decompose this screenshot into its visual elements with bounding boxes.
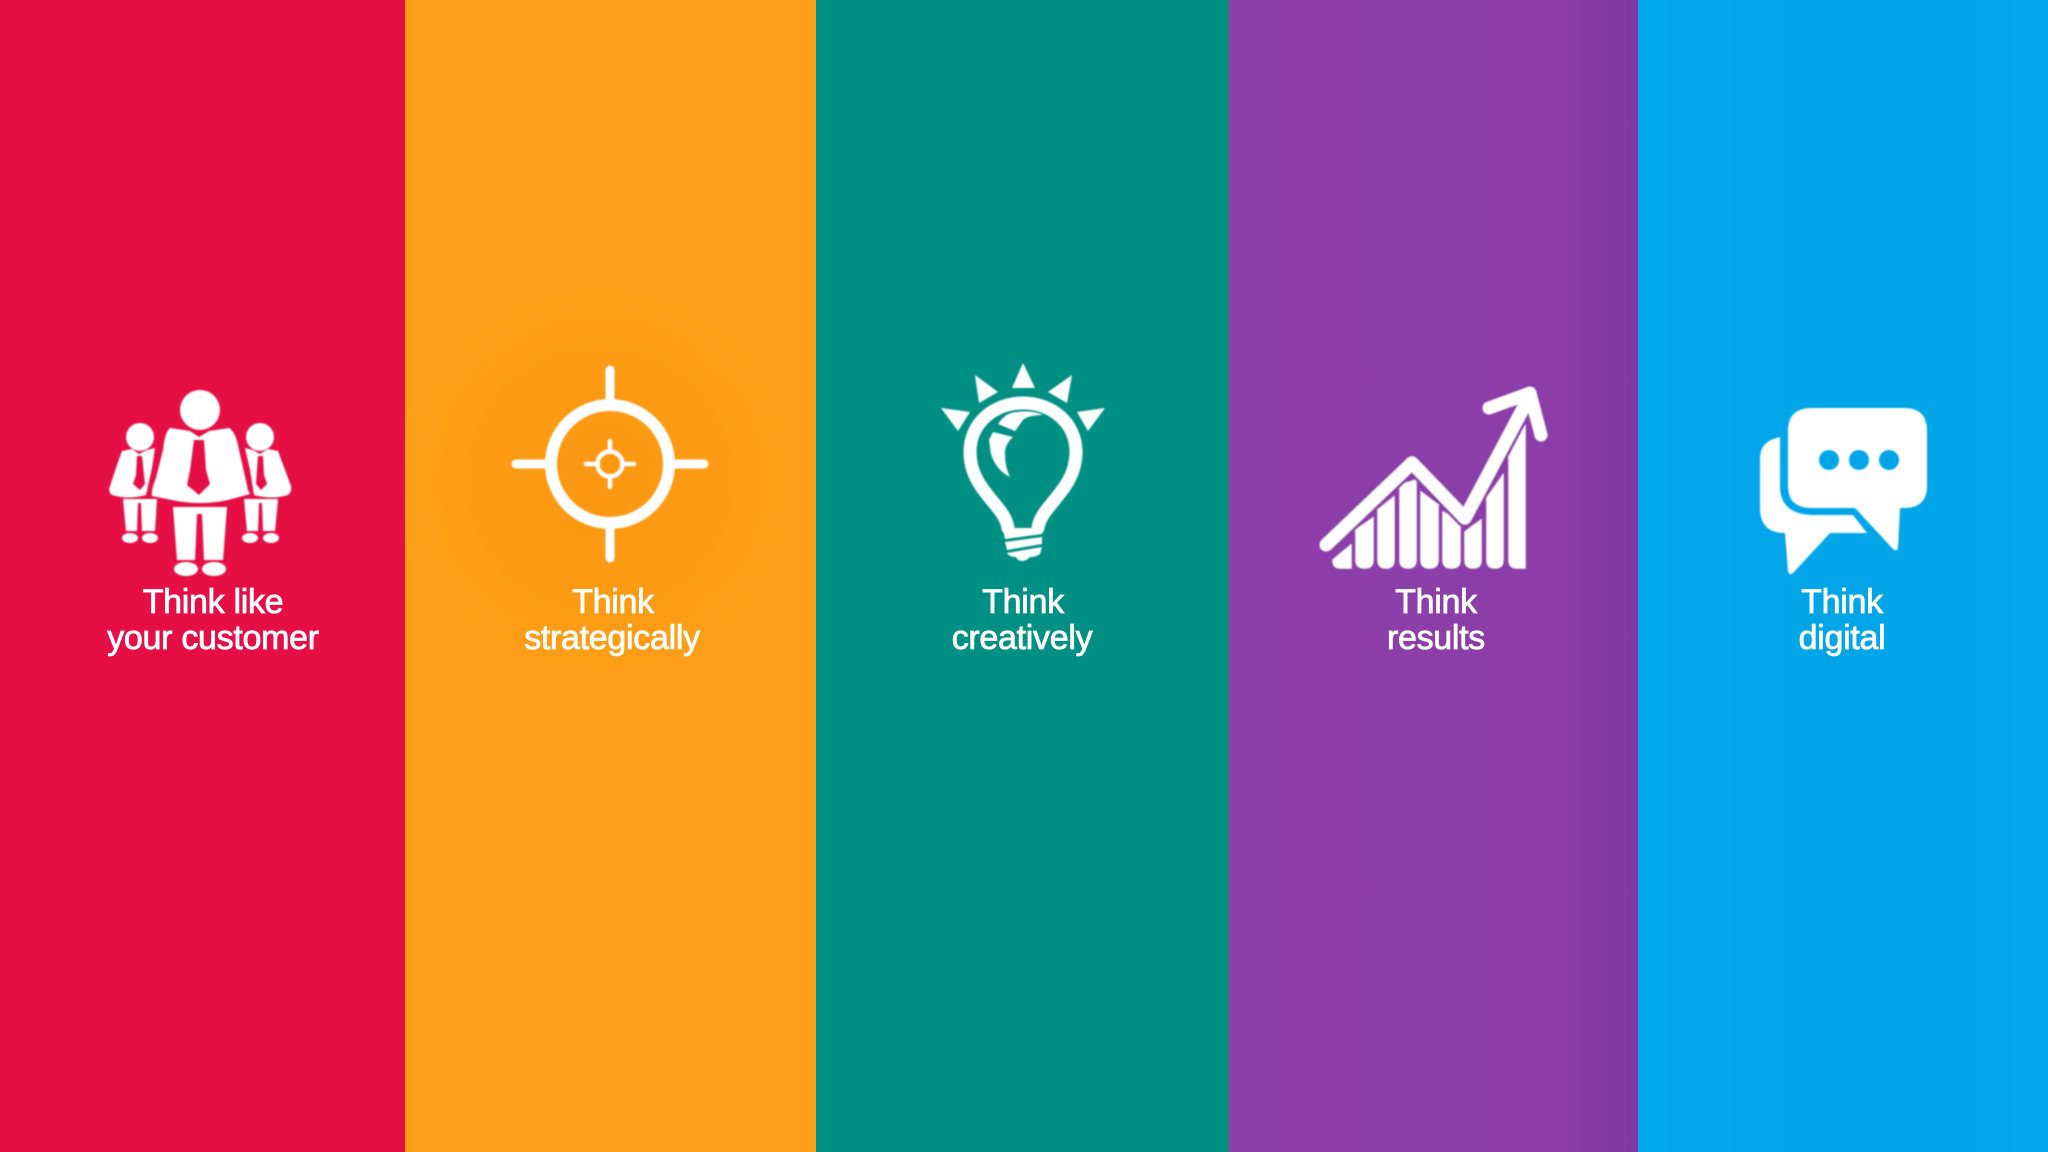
label: think creatively (952, 583, 1093, 657)
panel: think results (1229, 0, 1638, 1152)
icon: three business people (109, 390, 291, 576)
icon: rising chart with arrow (1326, 393, 1541, 568)
label: think creatively: Think (982, 583, 1065, 621)
label: think digital (1799, 583, 1885, 657)
label: think like your customer: Think like (143, 583, 283, 621)
label: think strategically (524, 583, 700, 657)
label: think strategically: Think (572, 583, 655, 621)
label: think results: Think (1395, 583, 1478, 621)
label: think digital: Think (1801, 583, 1884, 621)
label: think results: results (1387, 619, 1485, 657)
panel: think digital (1638, 0, 2048, 1152)
label: think like your customer: your customer (107, 619, 319, 657)
panel: think like your customer (0, 0, 405, 1152)
label: think strategically: strategically (524, 619, 700, 657)
icon: light bulb (941, 363, 1105, 561)
label: think results (1387, 583, 1485, 657)
panel: think creatively (816, 0, 1229, 1152)
icon: crosshair target (516, 370, 704, 558)
label: think creatively: creatively (952, 619, 1093, 657)
label: think like your customer (107, 583, 319, 657)
panel: think strategically (405, 0, 816, 1152)
icon: chat bubbles (1760, 408, 1927, 574)
label: think digital: digital (1799, 619, 1885, 657)
